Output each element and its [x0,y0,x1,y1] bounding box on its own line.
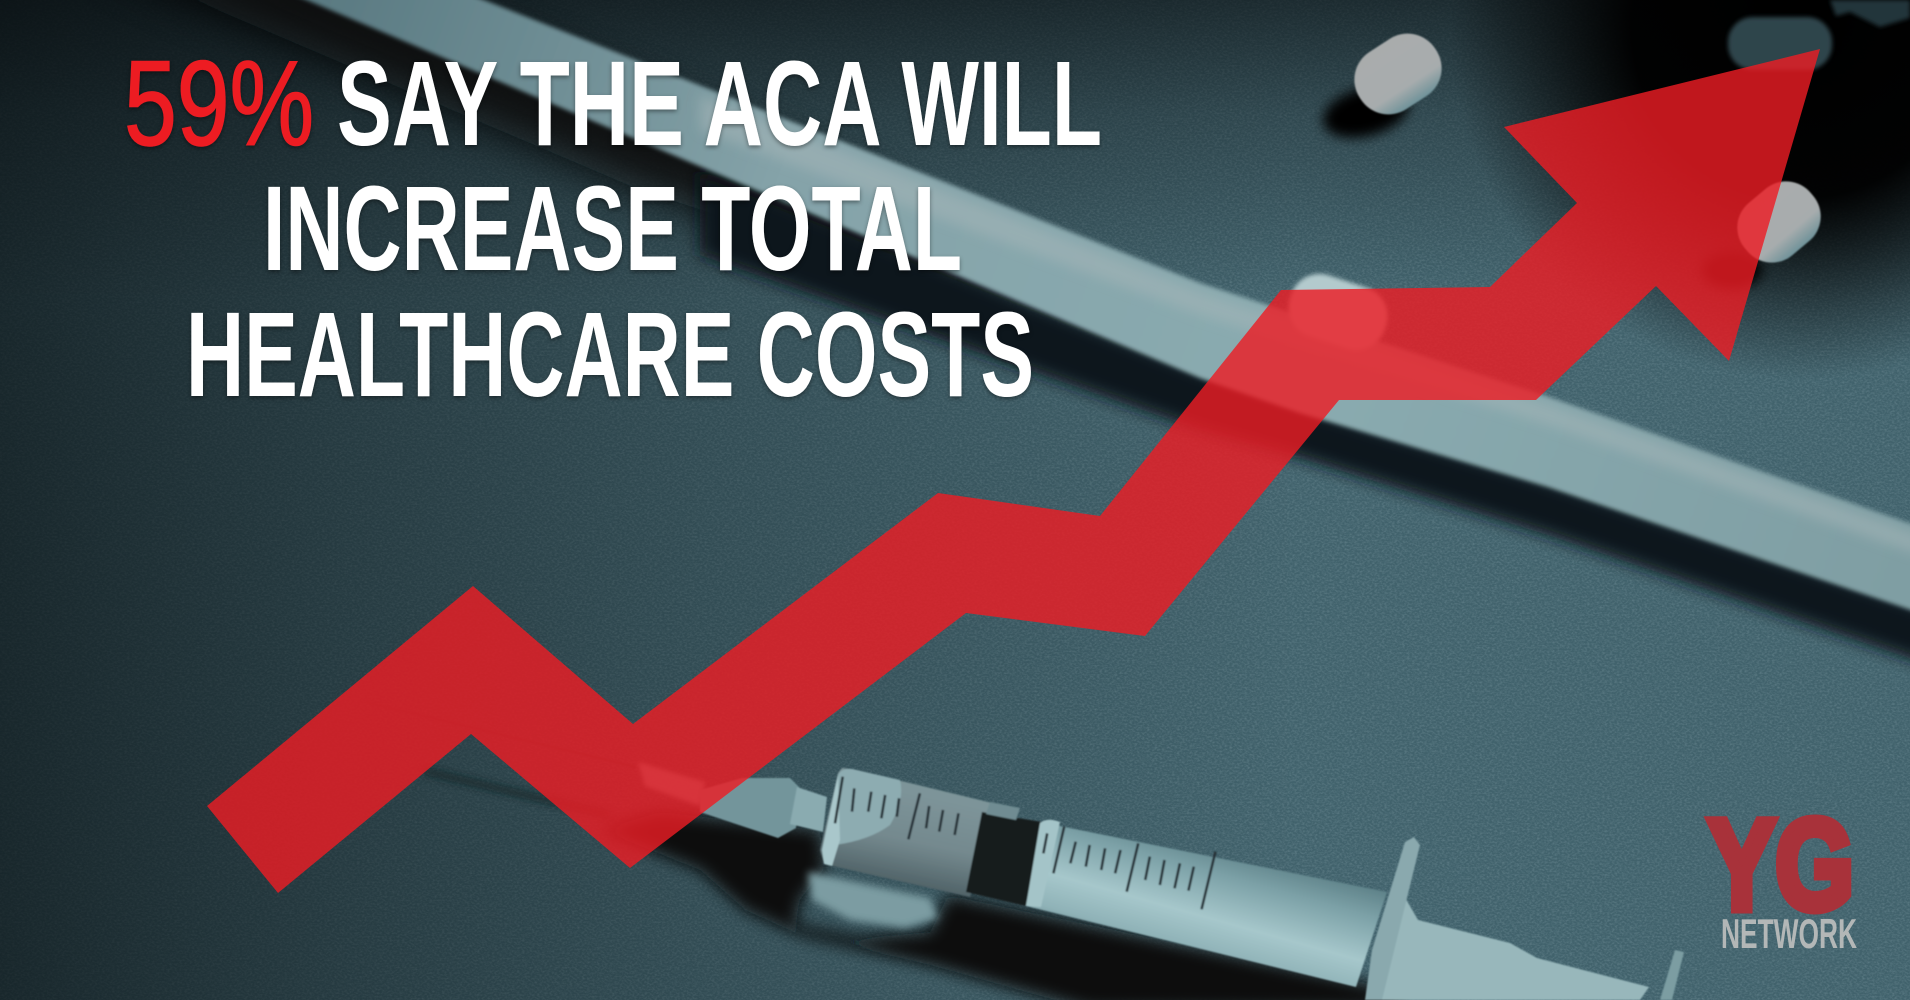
chamber rim highlight [822,775,840,866]
red percentage: 59% [124,35,314,171]
needle shadow [424,771,610,815]
liquid meniscus [835,769,901,845]
needle [366,702,636,767]
headline line 1: SAY THE ACA WILL [337,35,1102,171]
plunger rod [1375,880,1649,1000]
logo: YG Network [1708,794,1857,957]
tube shadow far [100,0,1010,310]
barrel [1022,822,1387,987]
arrow: rising healthcare costs [207,49,1820,893]
bottle top right [1830,0,1910,27]
front flange [1365,837,1420,1000]
logo mark: YG [1708,794,1854,937]
headline line 3: HEALTHCARE COSTS [186,286,1034,422]
barrel shoulder [1026,820,1060,907]
shadow reflection [808,872,938,928]
pill upper [1317,21,1454,147]
headline [124,35,1102,422]
stopper band [986,802,1020,820]
syringe [366,702,1684,1000]
medical tube [283,0,1910,613]
second flange [1660,950,1684,1000]
graduation marks [835,777,1215,909]
pill dark top right [1728,17,1832,70]
pill right [1702,168,1834,288]
pill on tube [1281,266,1395,358]
chamber [820,768,992,897]
tube shadow near [700,170,1910,672]
tube highlight [700,95,1910,555]
hub [638,762,705,806]
headline line 2: INCREASE TOTAL [263,160,962,296]
nozzle neck [790,787,827,832]
nozzle cone [700,778,800,838]
syringe shadow [600,812,1400,1000]
rubber stopper [966,812,1042,906]
